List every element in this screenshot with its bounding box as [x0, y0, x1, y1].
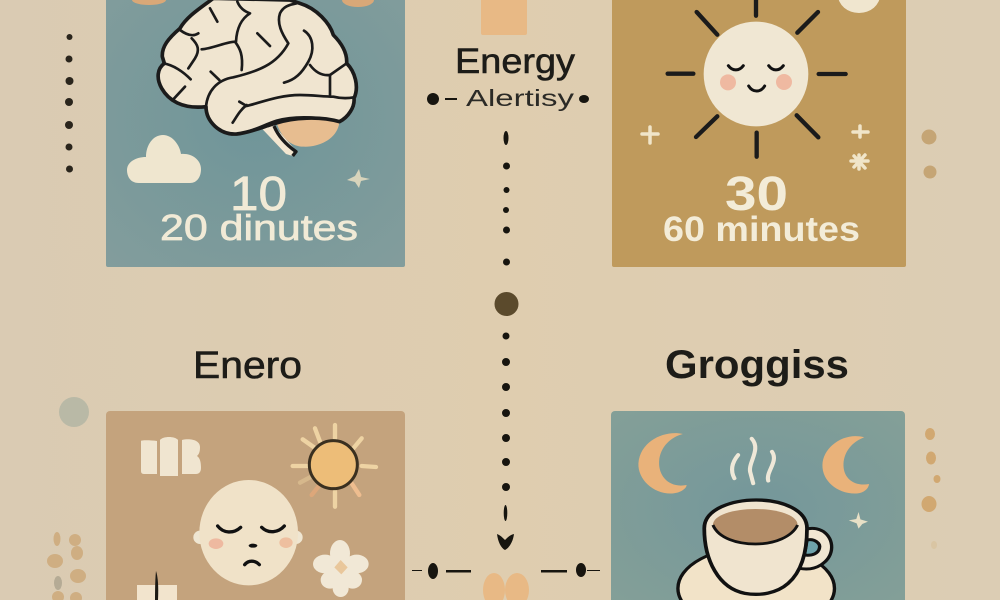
icon: right moon	[822, 436, 869, 493]
panel: 30-60 minutes	[612, 0, 906, 267]
connector: bottom horizontal	[412, 563, 600, 579]
icon: brain	[158, 0, 356, 156]
heading: Enero: Enero	[193, 345, 302, 387]
icon: cloud	[127, 135, 201, 183]
decor: grey dot	[59, 397, 89, 427]
icon: moon blob	[838, 0, 880, 13]
icon: sparkle	[849, 512, 868, 529]
icon: candle	[137, 571, 177, 600]
top centre swatch	[481, 0, 527, 35]
heading: Energy: Energy	[455, 42, 576, 81]
label: 60 minutes: 60 minutes	[663, 210, 860, 249]
decor: right dots bottom	[922, 428, 940, 549]
connector: top horizontal	[427, 93, 589, 105]
icon: steam	[732, 439, 774, 483]
icon: cup	[704, 500, 807, 594]
icon: flower	[313, 540, 369, 597]
subheading: alertisy: Alertisy	[466, 85, 575, 111]
label: 10: 10	[230, 168, 287, 221]
icon: top blobs	[132, 0, 374, 7]
decor: left dots	[65, 34, 74, 172]
decor: tan pebbles	[47, 532, 86, 600]
arrowhead	[497, 534, 514, 550]
icon: cup handle	[799, 528, 832, 569]
icon: sparkles	[642, 126, 868, 169]
panel: 10-20 minutes	[106, 0, 405, 267]
decor: right dots top	[922, 130, 936, 178]
icon: open book	[141, 437, 201, 476]
panel: coffee and moons	[611, 411, 905, 600]
centre node	[494, 292, 518, 316]
label: 30: 30	[725, 168, 788, 221]
label: 20 dinutes: 20 dinutes	[160, 207, 358, 248]
icon: left moon	[638, 433, 687, 493]
icon: saucer	[678, 547, 834, 600]
icon: small sun	[293, 425, 376, 507]
heading: Groggiss: Groggiss	[665, 343, 849, 387]
panel: tired face	[106, 411, 405, 600]
icon: sparkle	[347, 169, 370, 188]
icon: sleepy face	[193, 480, 303, 585]
icon: bottom swatch	[483, 573, 529, 600]
connector: vertical dots	[502, 131, 510, 521]
icon: smiling sun	[668, 0, 846, 157]
